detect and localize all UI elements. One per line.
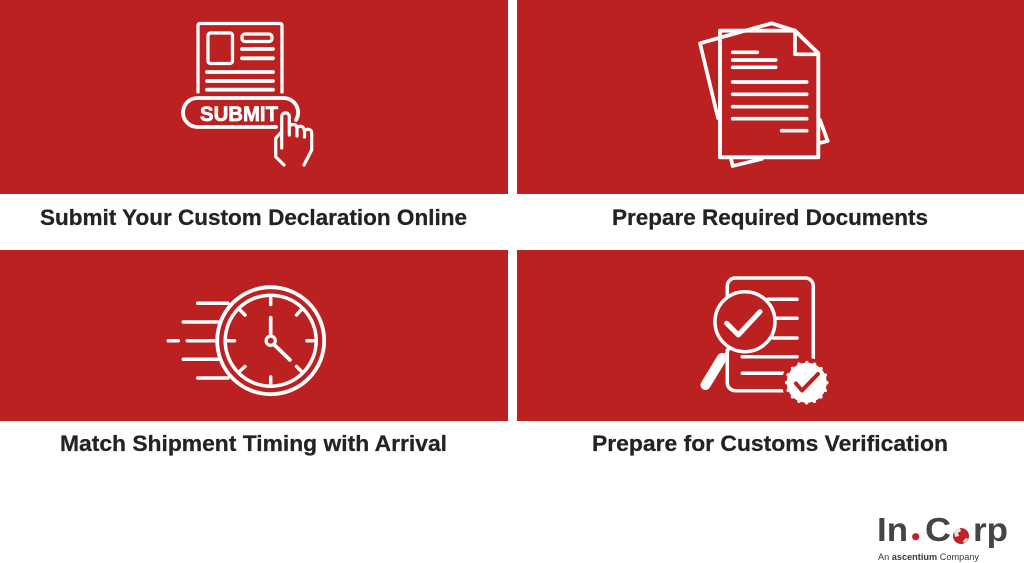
heading: documents: Prepare Required Documents: [612, 205, 928, 230]
heading: submit: Submit Your Custom Declaration Online: [40, 205, 467, 230]
logo: InCorp: [877, 511, 1008, 562]
heading: timing: Match Shipment Timing with Arrival: [60, 431, 447, 456]
icon: globe: [953, 528, 969, 544]
icon: submit form: [183, 24, 312, 165]
icon: fast clock: [168, 287, 324, 394]
icon: submit form: SUBMIT: [200, 103, 278, 126]
logo: InCorp: In: [877, 511, 908, 548]
icon: document stack: [700, 23, 828, 166]
logo: InCorp: rp: [973, 511, 1008, 548]
icon: document check: [706, 278, 832, 408]
panel: submit declaration: [0, 0, 508, 230]
panel: required documents: [517, 0, 1024, 230]
heading: verification: Prepare for Customs Verification: [592, 431, 948, 456]
logo: InCorp: C: [925, 511, 951, 548]
logo: InCorp: An ascentium Company: [878, 552, 979, 562]
panel: shipment timing: [0, 250, 508, 456]
panel: customs verification: [517, 250, 1024, 456]
